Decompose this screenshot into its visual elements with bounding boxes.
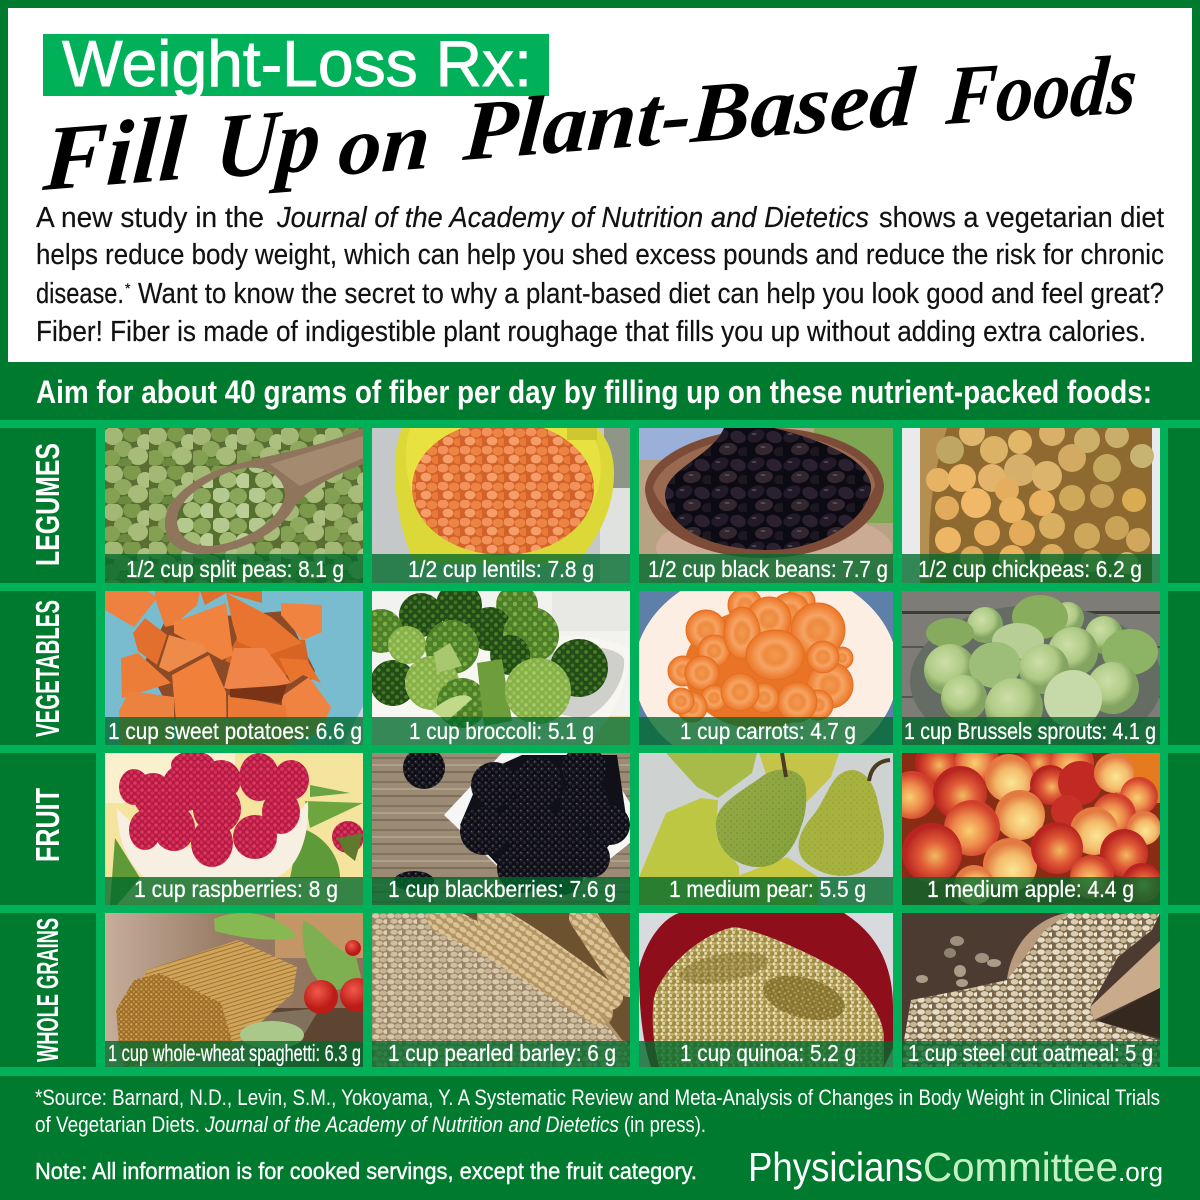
intro paragraph: shows a vegetarian diet [879, 202, 1164, 234]
caption: 1/2 cup split peas: 8.1 g [126, 556, 344, 582]
photo: black beans in clay bowl [639, 428, 893, 586]
logo: PhysiciansCommittee.org [748, 1144, 1163, 1190]
caption: 1 cup carrots: 4.7 g [680, 718, 856, 744]
caption: 1/2 cup lentils: 7.8 g [408, 556, 594, 582]
label: whole grains: WHOLE GRAINS [30, 918, 65, 1062]
caption: 1 medium apple: 4.4 g [927, 876, 1134, 902]
intro paragraph: disease. [36, 278, 124, 310]
intro paragraph: * [125, 280, 131, 296]
panel: sweet potatoes [105, 591, 363, 745]
panel: quinoa [639, 913, 893, 1067]
category labels [29, 443, 66, 1062]
panel: lentils [372, 428, 630, 583]
logo: PhysiciansCommittee.org: Committee [923, 1144, 1118, 1190]
photo: quinoa in red bowl [639, 913, 893, 1067]
caption: 1 cup broccoli: 5.1 g [409, 718, 594, 744]
photo: split peas with wooden spoon [105, 428, 363, 583]
panel: blackberries [372, 753, 630, 905]
caption: 1 cup quinoa: 5.2 g [680, 1040, 856, 1066]
panel: black beans [639, 428, 893, 583]
logo: PhysiciansCommittee.org: Physicians [748, 1144, 923, 1190]
caption: 1/2 cup chickpeas: 6.2 g [918, 556, 1142, 582]
script headline: Up [213, 88, 324, 198]
footer: source citation: (in press). [624, 1112, 706, 1137]
caption: 1 cup raspberries: 8 g [134, 876, 338, 902]
intro paragraph: A new study in the [36, 202, 264, 234]
panel: carrots [639, 591, 893, 745]
photo: Brussels sprouts on pewter plate [902, 591, 1162, 757]
photo: pearled barley and wheat ears [372, 913, 630, 1067]
panel: broccoli [372, 591, 630, 745]
photo: sweet potato chunks on blue plate [105, 591, 363, 745]
panel: pears [639, 753, 893, 905]
photo: green pears [639, 753, 893, 905]
script headline: Plant-Based [460, 50, 919, 179]
photo: oats spilling from wooden scoop [902, 913, 1160, 1067]
footer: source citation: Journal of the Academy of Nutrition and Dietetics [204, 1112, 619, 1137]
photo: chickpeas in white dish [902, 420, 1160, 583]
label: vegetables: VEGETABLES [29, 600, 66, 737]
caption: 1 medium pear: 5.5 g [669, 876, 866, 902]
photo: red and yellow apples [888, 739, 1162, 905]
script headline: Fill [40, 97, 189, 210]
photo: raspberries in white bowl [105, 751, 364, 905]
logo: PhysiciansCommittee.org: .org [1118, 1157, 1163, 1187]
panel: Brussels sprouts [902, 591, 1160, 745]
title tag: Weight-Loss Rx: Weight-Loss Rx: [62, 27, 532, 100]
photo: broccoli in white bowl [359, 582, 630, 745]
footer: source citation: of Vegetarian Diets. [35, 1112, 200, 1137]
panel: apples [902, 753, 1160, 905]
footer: source citation [35, 1085, 1160, 1137]
intro paragraph: Journal of the Academy of Nutrition and Dietetics [276, 202, 869, 234]
label: fruit: FRUIT [29, 788, 66, 862]
photo: blackberries in square white dish on wood [372, 746, 630, 905]
panel: whole-wheat spaghetti [105, 913, 363, 1067]
script headline [40, 38, 1140, 210]
intro paragraph [36, 202, 1164, 348]
photo: sliced carrots in white bowl [634, 566, 898, 776]
photo: red lentils in yellow bowl [372, 421, 630, 583]
panel: raspberries [105, 753, 363, 905]
panel: split peas [105, 428, 363, 583]
photo: whole-wheat spaghetti, basil and tomatoes [105, 913, 374, 1067]
panel: chickpeas [902, 428, 1160, 583]
panel: steel cut oatmeal [902, 913, 1160, 1067]
panel: pearled barley [372, 913, 630, 1067]
script headline: Foods [943, 38, 1140, 143]
footer: cooked servings note: Note: All information is for cooked servings, except the fruit category. [35, 1158, 697, 1184]
script headline: on [336, 95, 433, 193]
header panel [8, 8, 1192, 362]
